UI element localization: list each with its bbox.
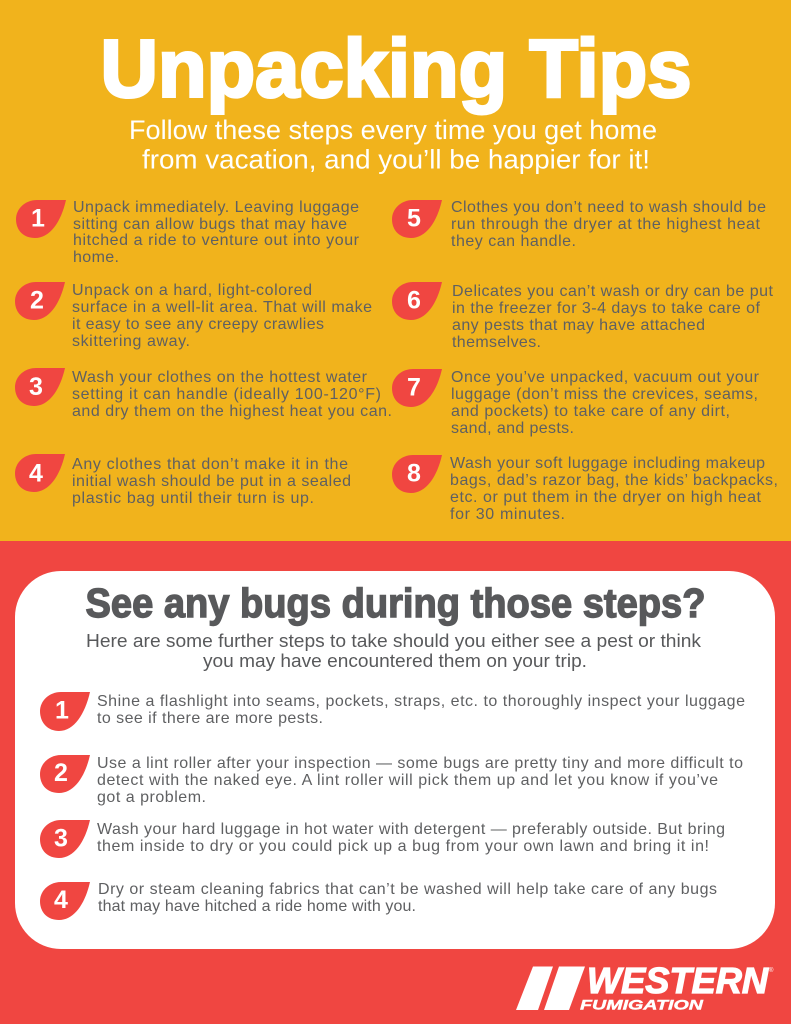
tip 4: 4 [29, 460, 43, 488]
tip 1 [16, 199, 360, 266]
tip 4: plastic bag until their turn is up. [72, 490, 314, 507]
tip 5: 5 [407, 204, 421, 232]
tip 3: 3 [29, 373, 43, 401]
tip 2: it easy to see any creepy crawlies [72, 316, 324, 333]
step 1: 1 [55, 696, 69, 724]
tip 6: themselves. [452, 334, 541, 351]
step 1: Shine a flashlight into seams, pockets, straps, etc. to thoroughly inspect your luggage [97, 693, 745, 710]
subtitle [129, 115, 657, 174]
tip 2: 2 [30, 286, 44, 314]
tip 6: in the freezer for 3-4 days to take care of [452, 300, 761, 317]
step 2 [40, 755, 743, 806]
logo: Western Fumigation: FUMIGATION [580, 998, 703, 1012]
tip 7: Once you’ve unpacked, vacuum out your [451, 369, 760, 386]
panel intro: Here are some further steps to take should you either see a pest or think [86, 630, 702, 651]
tip 8 [392, 455, 778, 523]
logo: Western Fumigation [516, 960, 774, 1012]
subtitle: Follow these steps every time you get home [129, 115, 657, 145]
step 3 [40, 820, 725, 858]
tip 8: Wash your soft luggage including makeup [450, 455, 765, 472]
tip 8: for 30 minutes. [450, 506, 565, 523]
tip 1: 1 [31, 204, 45, 232]
tip 2 [15, 282, 372, 350]
step 3: 3 [54, 824, 68, 852]
panel: see any bugs [15, 571, 775, 949]
tip 5: run through the dryer at the highest heat [451, 216, 761, 233]
tip 4 [15, 454, 351, 507]
step 2: got a problem. [97, 789, 206, 806]
step 3: them inside to dry or you could pick up a bug from your own lawn and bring it in! [97, 838, 709, 855]
panel: red lower background [0, 541, 791, 1024]
step 4: that may have hitched a ride home with you. [98, 898, 416, 915]
tip 2: surface in a well-lit area. That will make [72, 299, 372, 316]
panel intro: you may have encountered them on your trip. [203, 650, 587, 671]
step 1: to see if there are more pests. [97, 710, 323, 727]
step 2: 2 [54, 759, 68, 787]
tip 3: setting it can handle (ideally 100-120°F) [72, 386, 381, 403]
tip 8: 8 [407, 460, 421, 488]
panel: yellow header and tips background [0, 0, 791, 541]
tip 1: sitting can allow bugs that may have [73, 216, 347, 233]
step 2: detect with the naked eye. A lint roller will pick them up and let you know if you’ve [97, 772, 718, 789]
tip 6: 6 [407, 286, 421, 314]
tip 6: any pests that may have attached [452, 317, 705, 334]
subtitle: from vacation, and you’ll be happier for it! [142, 144, 650, 174]
logo: Western Fumigation: WESTERN [587, 960, 769, 1001]
step 3: Wash your hard luggage in hot water with detergent — preferably outside. But bring [97, 821, 725, 838]
tip 2: skittering away. [72, 333, 190, 350]
tip 3: and dry them on the highest heat you can. [72, 403, 392, 420]
panel intro [86, 630, 702, 671]
tip 2: Unpack on a hard, light-colored [72, 282, 312, 299]
tip 3 [15, 368, 392, 420]
panel heading: See any bugs during those steps? [86, 580, 706, 626]
tip 8: bags, dad’s razor bag, the kids’ backpacks, [450, 472, 778, 489]
tip 4: Any clothes that don’t make it in the [72, 456, 348, 473]
tip 5: they can handle. [451, 233, 576, 250]
tip 1: hitched a ride to venture out into your [73, 232, 360, 249]
step 4: 4 [54, 886, 68, 914]
tip 4: initial wash should be put in a sealed [72, 473, 351, 490]
title: Unpacking Tips [100, 24, 692, 114]
tip 1: home. [73, 249, 119, 266]
step 4 [40, 881, 717, 920]
step 1 [40, 692, 745, 731]
step 4: Dry or steam cleaning fabrics that can’t be washed will help take care of any bugs [98, 881, 717, 898]
tip 7 [392, 369, 760, 437]
step 2: Use a lint roller after your inspection — some bugs are pretty tiny and more difficult to [97, 755, 743, 772]
tip 5: Clothes you don’t need to wash should be [451, 199, 766, 216]
tip 6 [392, 282, 774, 351]
tip 7: and pockets) to take care of any dirt, [451, 403, 730, 420]
tip 3: Wash your clothes on the hottest water [72, 369, 368, 386]
tip 1: Unpack immediately. Leaving luggage [73, 199, 359, 216]
tip 8: etc. or put them in the dryer on high heat [450, 489, 762, 506]
logo: Western Fumigation: ® [769, 967, 774, 974]
tip 7: 7 [407, 374, 421, 402]
tip 5 [392, 199, 766, 250]
tip 6: Delicates you can’t wash or dry can be put [452, 283, 774, 300]
tip 7: luggage (don’t miss the crevices, seams, [451, 386, 758, 403]
tip 7: sand, and pests. [451, 420, 574, 437]
